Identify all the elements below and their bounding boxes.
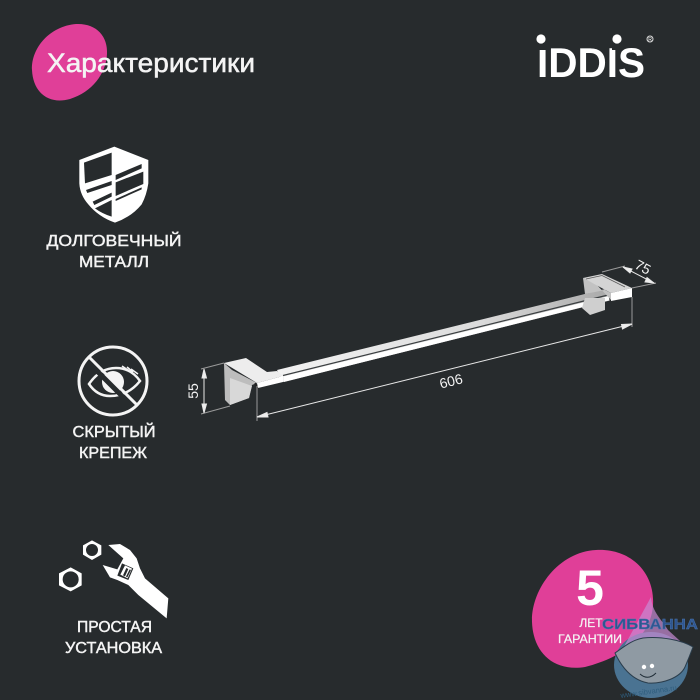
brand logo: R xyxy=(648,37,652,43)
towel bar drawing xyxy=(185,256,656,421)
label: easy installation: УСТАНОВКА xyxy=(65,640,162,657)
icon: large nut xyxy=(59,567,82,591)
warranty badge: ГАРАНТИИ xyxy=(558,632,622,646)
dimension 606 xyxy=(257,297,632,421)
warranty badge: ЛЕТ xyxy=(579,616,603,630)
watermark text: СИБВАННА xyxy=(602,616,698,633)
label: durable metal: МЕТАЛЛ xyxy=(79,254,149,271)
value 55: 55 xyxy=(185,383,201,399)
watermark url: www.sibvanna.ru xyxy=(619,683,677,700)
value 606: 606 xyxy=(438,370,464,392)
left bracket xyxy=(224,358,283,405)
label: durable metal xyxy=(46,231,182,271)
right bracket xyxy=(582,274,632,315)
dimension 55 xyxy=(201,363,230,414)
warranty badge: 5 xyxy=(576,560,604,616)
bar xyxy=(277,289,610,382)
label: hidden fastening xyxy=(72,422,156,462)
icon: crossed-out eye xyxy=(79,347,147,415)
icon: wrench xyxy=(103,544,168,618)
icon: shield xyxy=(79,147,148,223)
watermark: Sibvanna mascot xyxy=(602,597,698,700)
icon: small nut xyxy=(83,540,101,560)
title with pink blob xyxy=(32,24,255,100)
dimension 75 xyxy=(602,266,656,288)
title with pink blob: Характеристики xyxy=(47,48,255,78)
icon: wrench and nuts xyxy=(59,540,168,618)
brand logo: IDDIS xyxy=(537,39,645,86)
label: hidden fastening: СКРЫТЫЙ xyxy=(72,422,156,441)
label: easy installation: ПРОСТАЯ xyxy=(77,619,152,636)
label: durable metal: ДОЛГОВЕЧНЫЙ xyxy=(46,231,182,250)
warranty badge xyxy=(532,550,653,668)
label: easy installation xyxy=(65,619,162,657)
label: hidden fastening: КРЕПЕЖ xyxy=(79,445,147,462)
value 75: 75 xyxy=(632,256,654,278)
